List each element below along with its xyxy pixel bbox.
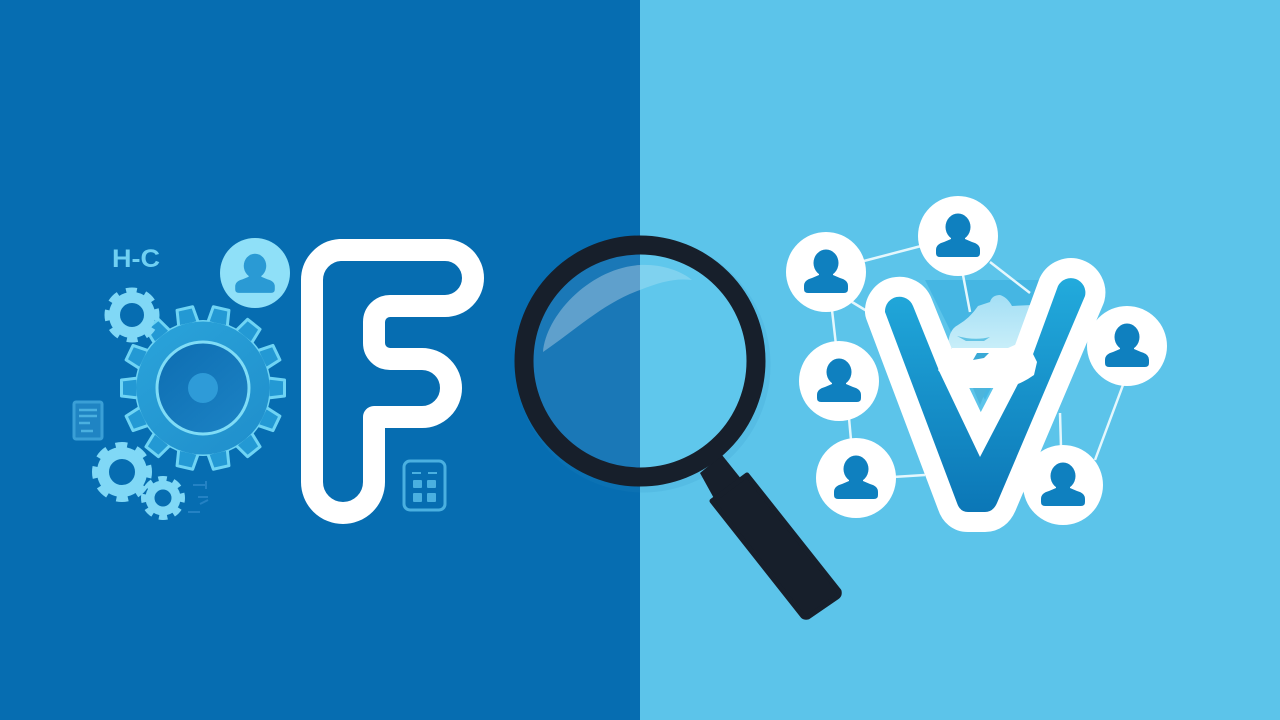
lens right half [640, 254, 688, 266]
icon: user badge [220, 238, 290, 308]
user node 4 [816, 438, 896, 518]
white blob across V [938, 340, 1037, 388]
icon: gear tiny [144, 479, 182, 517]
small blue mark in blob [973, 353, 989, 360]
user node 3 [799, 341, 879, 421]
icon: small gear top [108, 291, 156, 339]
icon: document [74, 402, 102, 439]
V interior tint [925, 280, 1045, 400]
right panel: V with user network [786, 196, 1167, 525]
network connection lines [832, 245, 1123, 477]
icon: main gear [122, 306, 284, 470]
letter F outline [312, 250, 473, 513]
lens highlight left [543, 265, 640, 352]
handle neck [700, 455, 742, 502]
lens ring [524, 245, 756, 477]
icon: gear lower left [96, 446, 148, 498]
blue streak in cloud [957, 336, 990, 341]
user node 6 [1087, 306, 1167, 386]
lens left half [534, 254, 640, 468]
user node 5 [1023, 445, 1103, 525]
user node 2 [786, 232, 866, 312]
handle grip [712, 475, 839, 617]
cloud shape behind V [948, 295, 1032, 348]
icon: faint chart fragment [188, 481, 208, 512]
teal triangle at V notch [973, 388, 987, 405]
icon label: H-C: H-C [112, 245, 160, 273]
magnifying glass [524, 245, 839, 617]
user node 1 [918, 196, 998, 276]
left panel: F with process icons [74, 238, 473, 517]
left panel background [0, 0, 640, 720]
lens highlight right [640, 265, 692, 290]
ring soft shadow [525, 247, 761, 483]
icon: calculator [404, 461, 445, 510]
letter V [885, 278, 1085, 512]
right panel background [640, 0, 1280, 720]
